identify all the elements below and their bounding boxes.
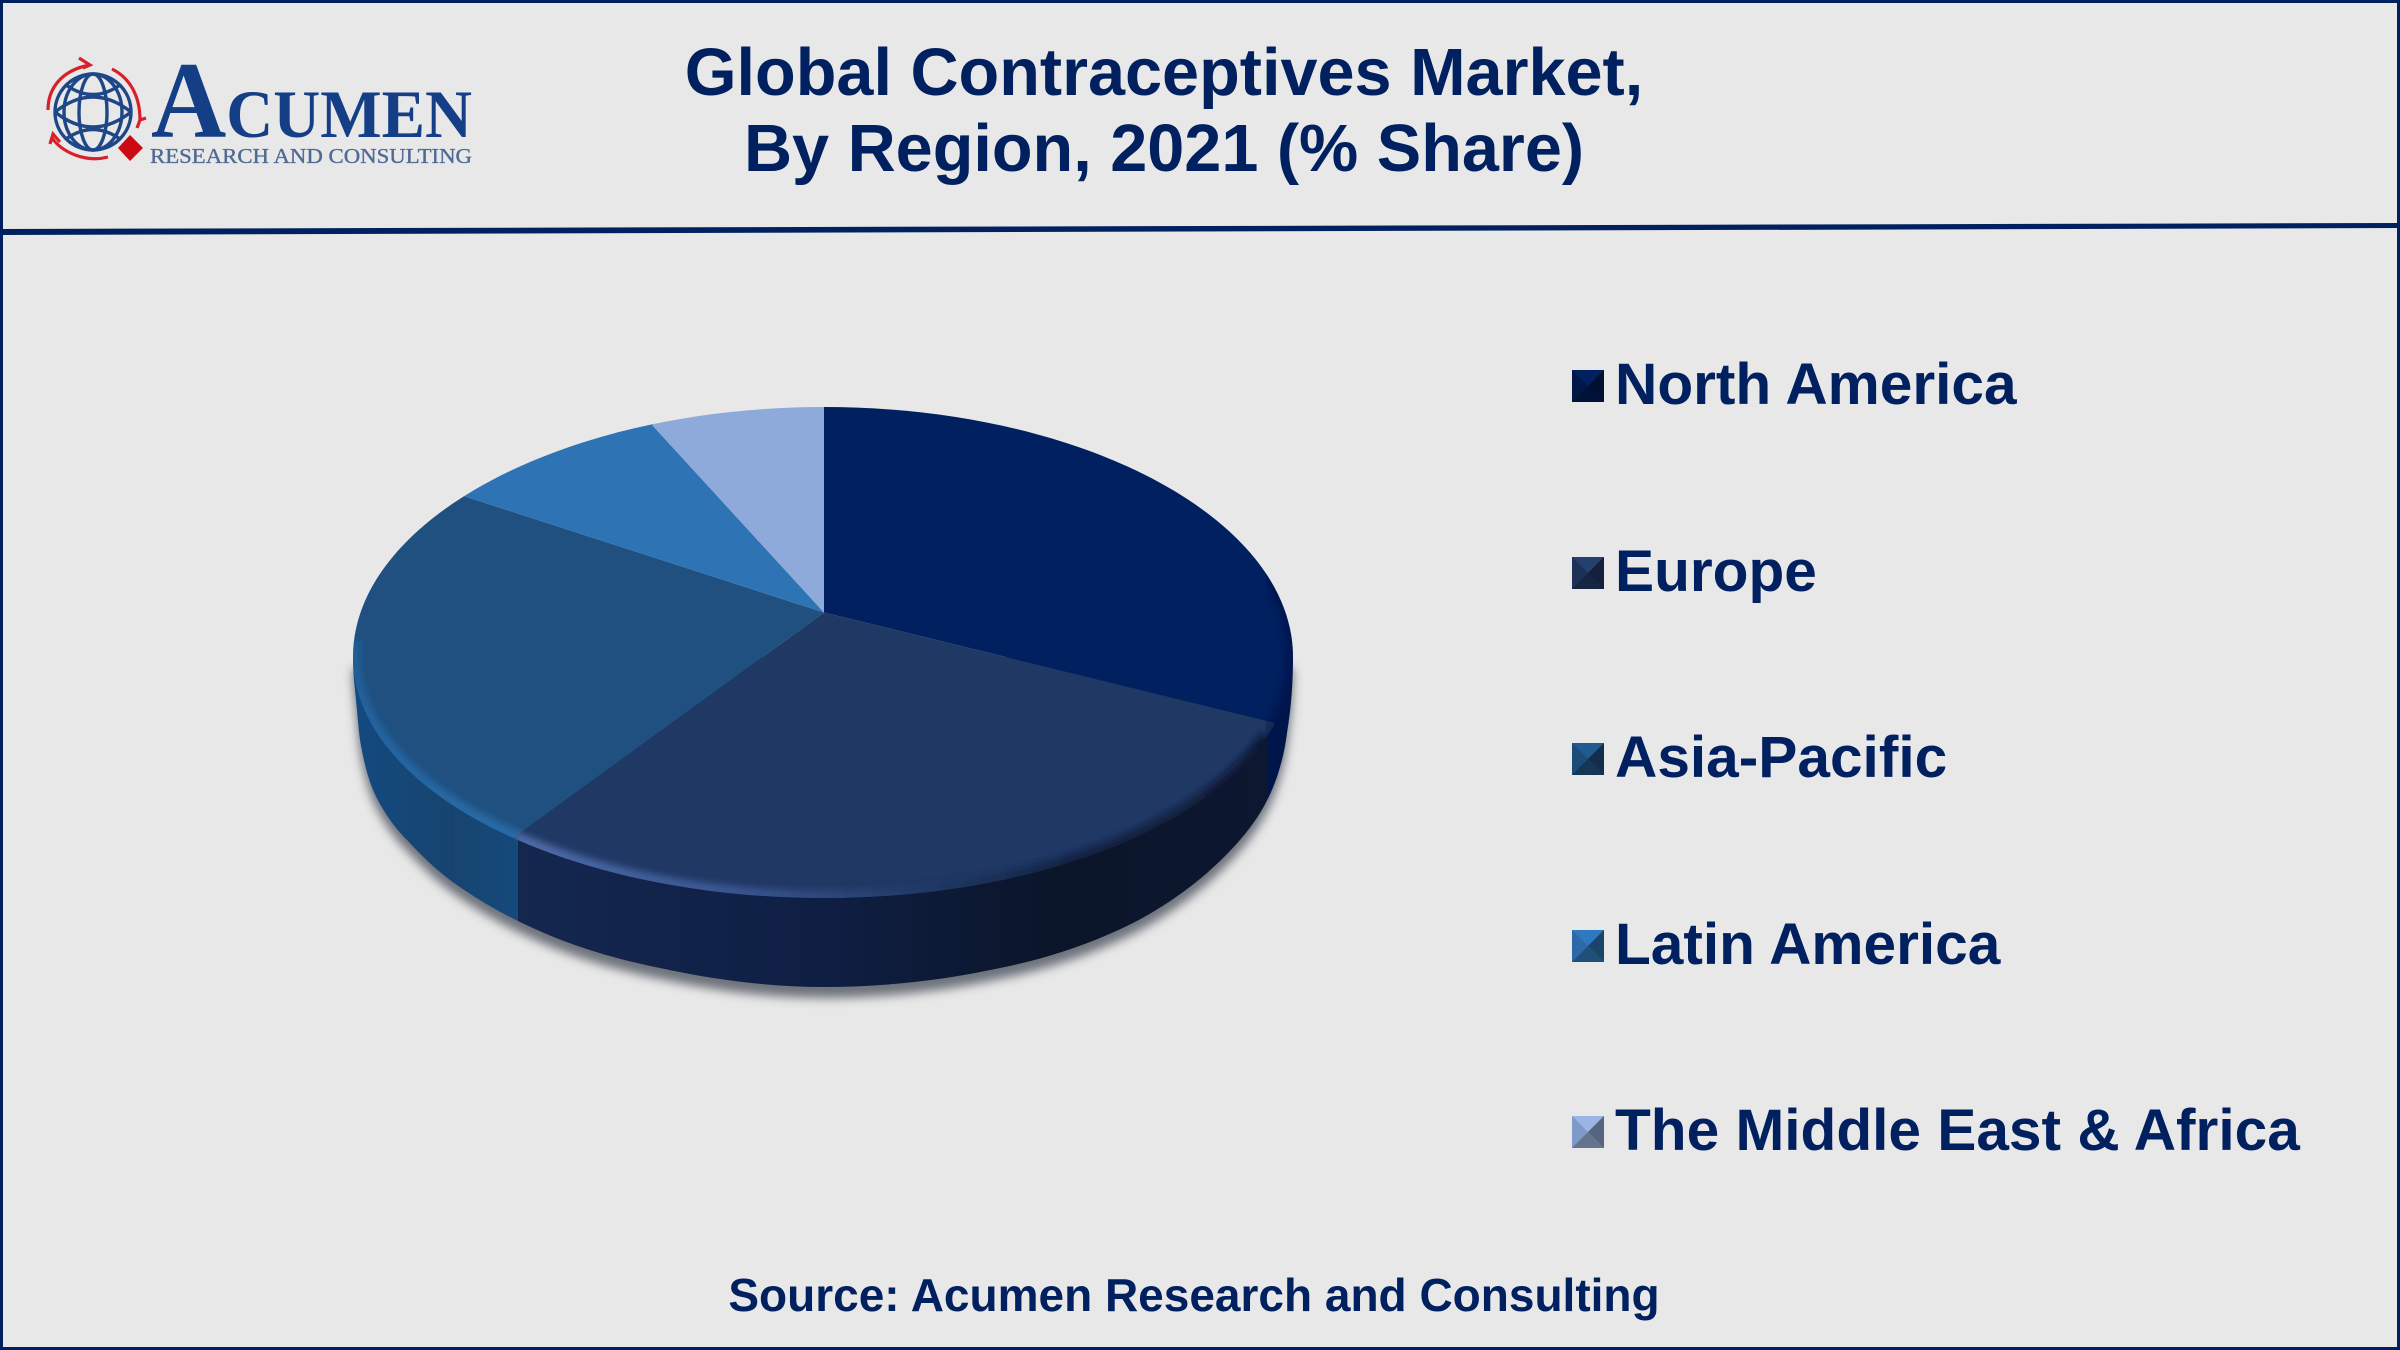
swatch — [1572, 1116, 1604, 1148]
swatch — [1572, 743, 1604, 775]
slice: Latin America — [464, 424, 824, 612]
slice: Europe — [514, 612, 1275, 898]
pie bevel: Asia-Pacific rim — [352, 640, 515, 838]
pie shadow — [353, 668, 1293, 998]
icon: red arrows and diamond — [48, 58, 146, 161]
legend item: Latin America: Latin America — [1615, 912, 2001, 977]
swatch — [1572, 930, 1604, 962]
legend item: Asia-Pacific: Asia-Pacific — [1615, 725, 1947, 790]
source note: Source: Acumen Research and Consulting — [728, 1269, 1660, 1321]
swatch — [1572, 370, 1604, 402]
legend item: North America: North America — [1615, 352, 2017, 417]
legend item: The Middle East & Africa: The Middle East & Africa — [1615, 1098, 2300, 1163]
legend — [1572, 352, 2300, 1163]
3D pie chart — [330, 380, 1320, 998]
icon: globe — [55, 74, 131, 150]
slice: Asia-Pacific — [353, 496, 824, 834]
title — [685, 36, 1643, 186]
pie side: Asia-Pacific — [353, 659, 518, 921]
pie side: Europe — [518, 657, 1267, 987]
logo wordmark: ACUMEN — [151, 40, 472, 161]
pie side: North America — [1267, 658, 1293, 800]
legend item: Europe: Europe — [1615, 539, 1817, 604]
title: By Region, 2021 (% Share) — [744, 112, 1584, 186]
title: Global Contraceptives Market, — [685, 36, 1643, 110]
slice: Middle East and Africa — [652, 407, 824, 612]
header divider — [0, 223, 2400, 235]
swatch — [1572, 557, 1604, 589]
logo: Acumen Research and Consulting — [48, 40, 472, 168]
pie bevel: North America rim — [1267, 575, 1293, 737]
pie bevel: Europe rim — [515, 737, 1267, 897]
pie top surface — [353, 407, 1293, 898]
logo tagline: RESEARCH AND CONSULTING — [150, 144, 472, 168]
slice: North America — [824, 407, 1293, 723]
